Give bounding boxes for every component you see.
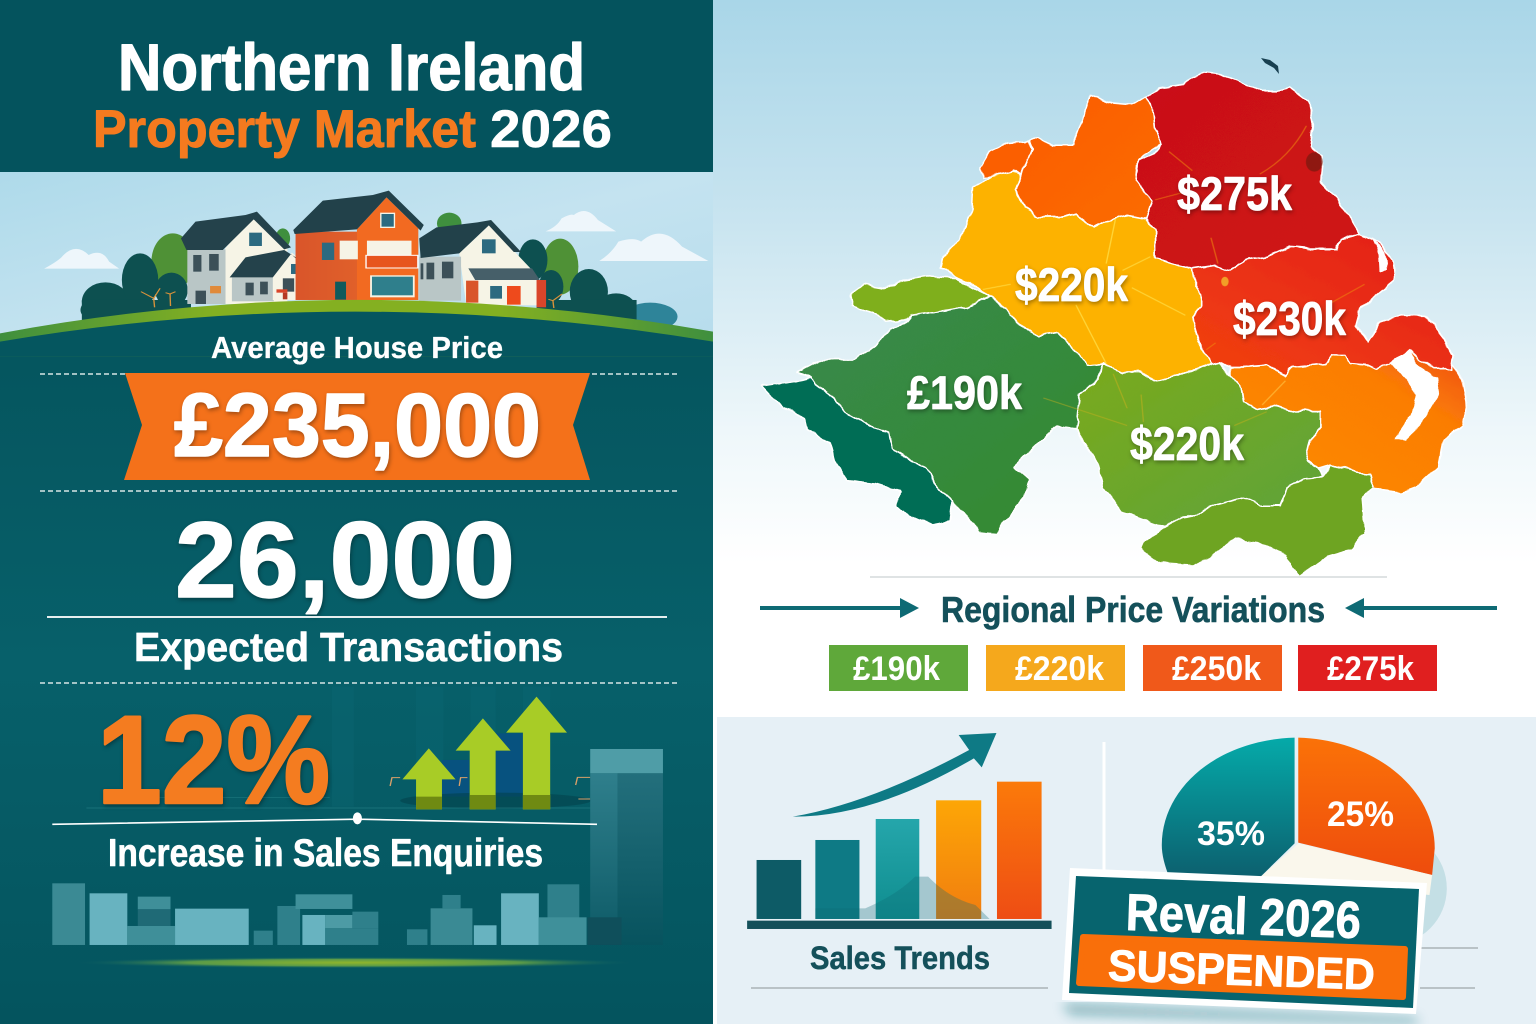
- title: 2026: [490, 100, 612, 159]
- title: Property Market: [93, 100, 476, 159]
- title: Northern Ireland: [118, 30, 585, 104]
- house left: [181, 212, 291, 304]
- price legend: £220k: [1015, 650, 1104, 688]
- pie chart: [1162, 738, 1447, 945]
- house small: [230, 250, 324, 301]
- average house price label: Average House Price: [211, 330, 503, 365]
- price labels: [907, 167, 1347, 470]
- price labels: £190k: [907, 366, 1023, 419]
- skyline backdrop: [52, 687, 663, 968]
- trees: [80, 213, 678, 331]
- enquiries stat: [52, 687, 663, 968]
- callout: Reval 2026 suspended: Reval 2026: [1125, 884, 1362, 950]
- price legend: £275k: [1327, 650, 1414, 688]
- map highlight streaks: [983, 126, 1365, 426]
- price legend: £190k: [853, 650, 940, 688]
- growth arrows: [402, 697, 567, 809]
- regional price heading with arrows: Regional Price Variations: [941, 589, 1325, 630]
- sales trends chart: [747, 733, 1052, 988]
- price legend: [829, 645, 1437, 691]
- header band: [0, 0, 713, 172]
- price labels: $220k: [1015, 258, 1129, 311]
- island: [1261, 58, 1279, 74]
- title: [93, 30, 612, 159]
- choropleth map of Northern Ireland: [762, 58, 1467, 577]
- callout: Reval 2026 suspended: SUSPENDED: [1107, 941, 1376, 1000]
- pie chart: 35%: [1197, 815, 1265, 853]
- transactions stat: 26,000: [175, 499, 515, 620]
- house right: [419, 220, 546, 307]
- hero illustration: houses on a hill: [0, 172, 713, 357]
- enquiries stat: Increase in Sales Enquiries: [108, 832, 543, 875]
- price labels: $230k: [1233, 292, 1347, 345]
- transactions stat: Expected Transactions: [134, 624, 563, 670]
- sales trends chart: Sales Trends: [810, 940, 990, 976]
- price labels: $220k: [1130, 417, 1245, 470]
- clouds: [44, 211, 708, 269]
- hill: [0, 300, 713, 357]
- price legend: £250k: [1172, 650, 1261, 688]
- house centre: [293, 191, 424, 300]
- regional price heading with arrows: [760, 589, 1497, 630]
- panel: bottom right: [717, 717, 1536, 1024]
- callout: Reval 2026 suspended: [1062, 868, 1427, 1024]
- enquiries stat: 12%: [97, 691, 330, 830]
- pie chart: 25%: [1327, 795, 1394, 834]
- transactions stat: [47, 499, 667, 670]
- price banner: £235,000: [174, 376, 541, 476]
- panel: left column: [0, 0, 713, 1024]
- price labels: $275k: [1177, 167, 1293, 220]
- page background: right side sky: [713, 0, 1536, 1024]
